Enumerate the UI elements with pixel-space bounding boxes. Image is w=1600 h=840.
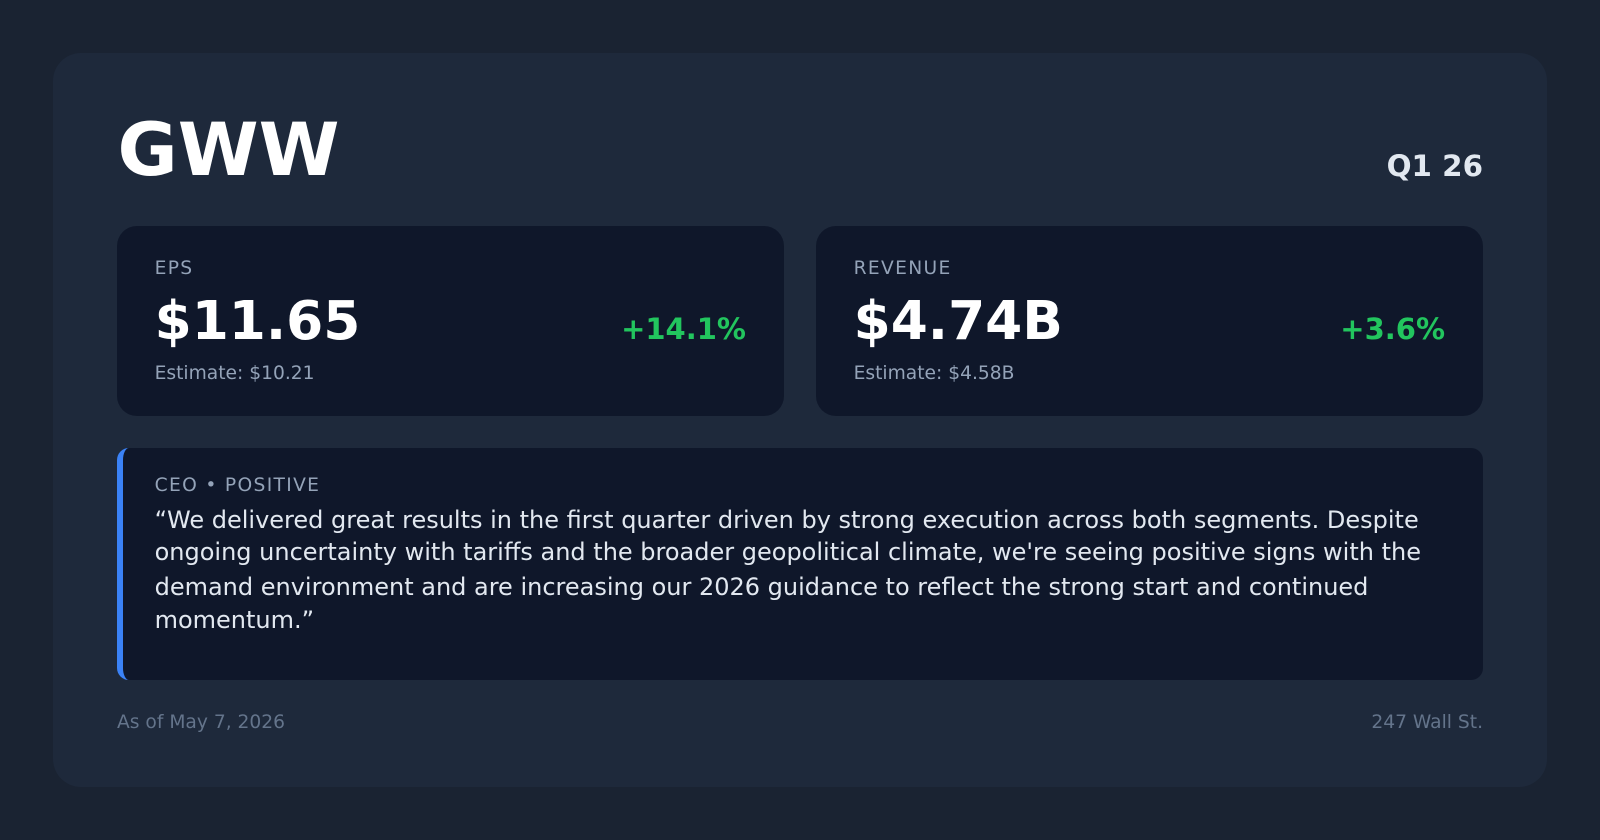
quote label: CEO • POSITIVE <box>155 475 320 496</box>
title: ticker: GWW <box>118 108 339 193</box>
quote text <box>155 506 1421 634</box>
footer: source: 247 Wall St. <box>1371 712 1483 733</box>
quote text: demand environment and are increasing our 2026 guidance to reflect the strong start and continued <box>155 573 1368 601</box>
EPS label: EPS <box>155 258 193 279</box>
revenue value: $4.74B <box>854 289 1063 352</box>
revenue change: +3.6% <box>1340 312 1445 346</box>
footer: date: As of May 7, 2026 <box>117 712 285 733</box>
quote text: momentum.” <box>155 606 314 634</box>
revenue label: REVENUE <box>854 258 952 279</box>
quote text: ongoing uncertainty with tariffs and the broader geopolitical climate, we're seeing positive signs with the <box>155 538 1421 566</box>
panel: EPS <box>117 226 784 416</box>
quarter label: Q1 26 <box>1387 149 1483 183</box>
panel: CEO quote <box>117 448 1483 680</box>
revenue estimate: Estimate: $4.58B <box>854 363 1014 384</box>
EPS estimate: Estimate: $10.21 <box>155 363 314 384</box>
EPS value: $11.65 <box>155 289 360 352</box>
panel: revenue <box>816 226 1483 416</box>
EPS change: +14.1% <box>621 312 746 346</box>
quote text: “We delivered great results in the first quarter driven by strong execution across both segments. Despite <box>155 506 1419 534</box>
